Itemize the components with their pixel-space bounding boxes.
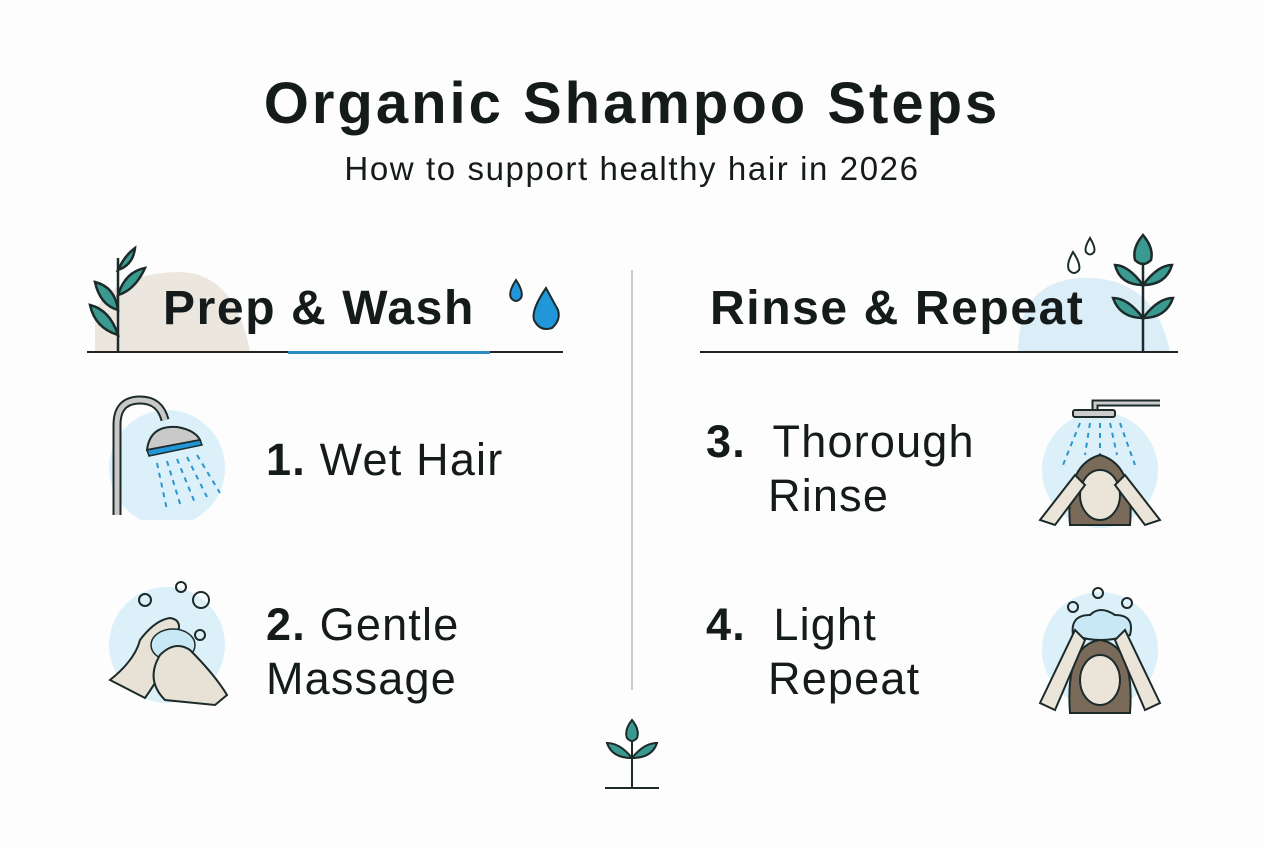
step 3 text: Rinse (768, 470, 889, 521)
icon: water drops (510, 280, 559, 329)
step 3 text (706, 416, 975, 521)
icon: hands with lather (108, 581, 228, 706)
divider (631, 270, 633, 690)
heading: Prep & Wash (163, 282, 475, 335)
step 2 text: Massage (266, 653, 457, 704)
icon: bottom sprout (605, 718, 659, 789)
icon: rinse head (1038, 400, 1162, 528)
panel: prep & wash header (88, 246, 560, 351)
step 4 text (706, 599, 920, 704)
step 1 text: 1. Wet Hair (266, 434, 503, 485)
title: Organic Shampoo Steps (264, 71, 1000, 136)
step 2 text: 2. Gentle (266, 599, 459, 650)
icon: shower (109, 396, 225, 520)
icon: beige blob (95, 272, 250, 352)
step 4 text: Repeat (768, 653, 920, 704)
step 4 text: 4. Light (706, 599, 877, 650)
rule left (87, 351, 563, 353)
step 3 text: 3. Thorough (706, 416, 975, 467)
panel: rinse & repeat header (710, 233, 1175, 351)
icon: plant (90, 248, 145, 352)
panel: rinse & repeat header: Rinse & Repeat (710, 282, 1085, 335)
subtitle: How to support healthy hair in 2026 (344, 150, 920, 187)
icon: lather head (1038, 587, 1162, 714)
step 2 text (266, 599, 459, 704)
